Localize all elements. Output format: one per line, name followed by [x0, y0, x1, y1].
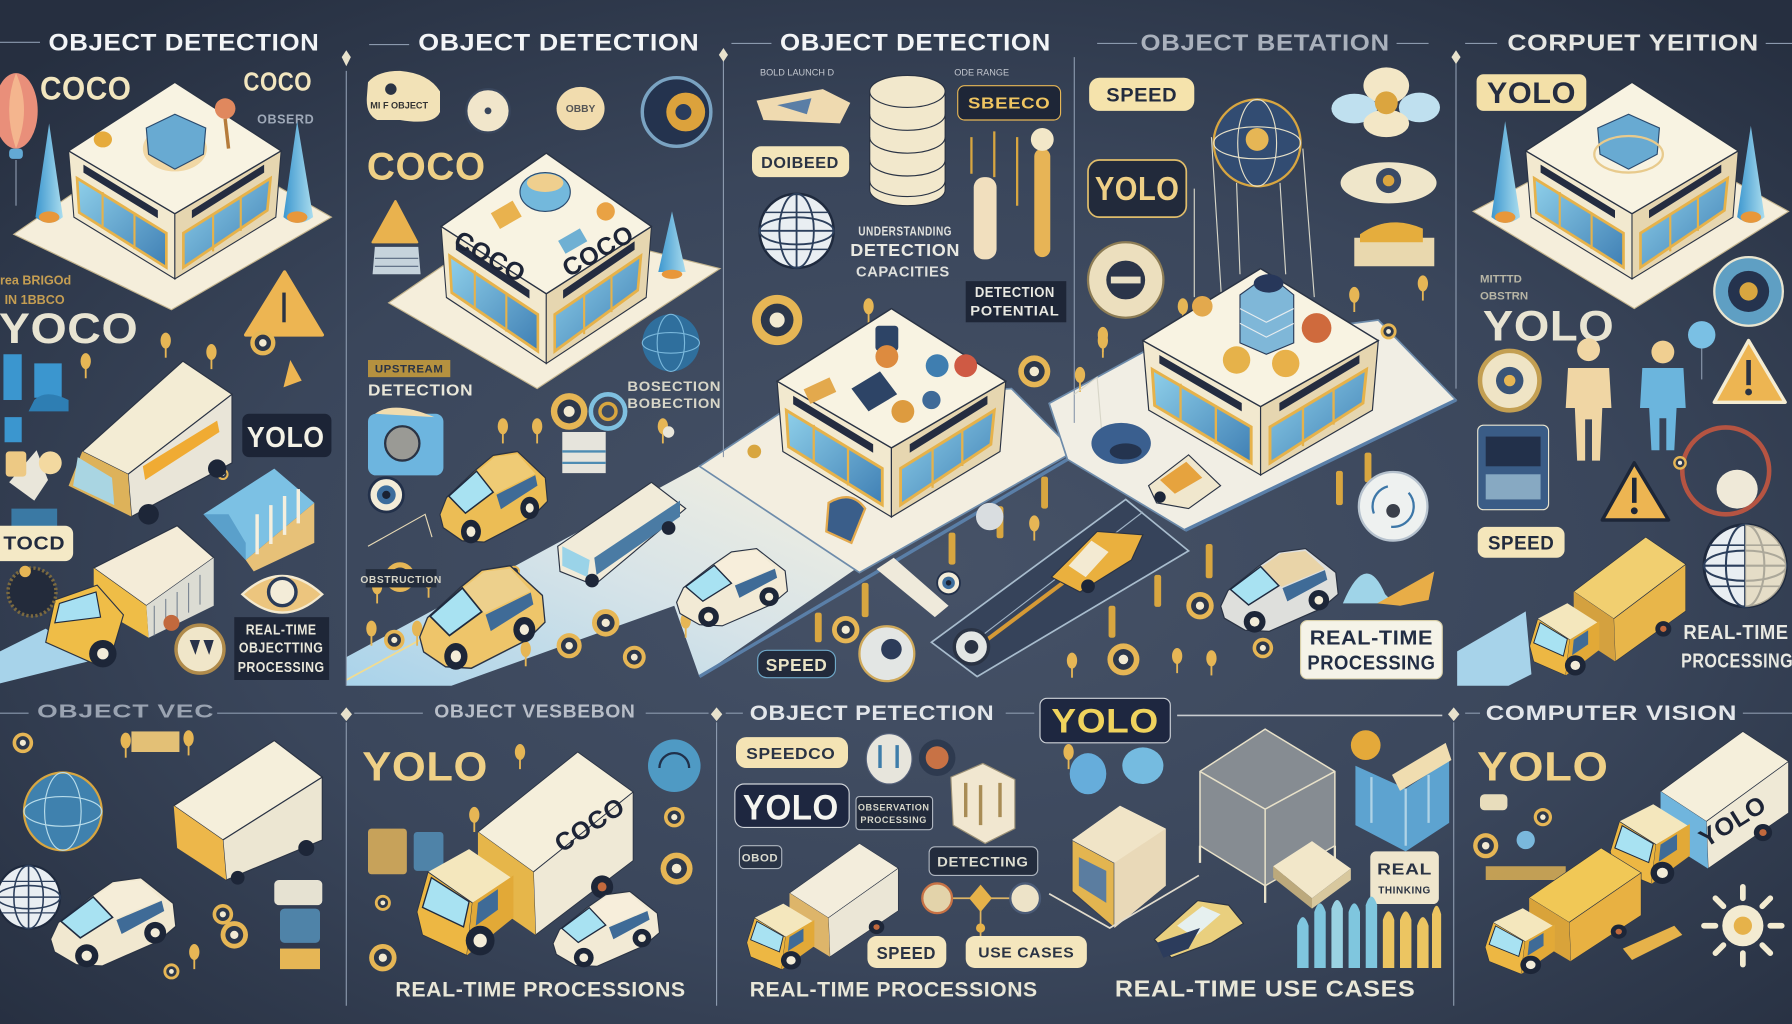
bottom text: REAL-TIME PROCESSIONS [395, 977, 686, 1002]
sphere [642, 314, 699, 371]
bar chart [1297, 897, 1441, 968]
cream label: DOIBEED [761, 155, 839, 172]
small COCO label: COCO [243, 66, 312, 96]
disk stack [870, 75, 945, 206]
speed label [1089, 78, 1194, 111]
speed label [736, 737, 848, 768]
detection label: DETECTION [975, 285, 1055, 301]
small icons [1473, 794, 1566, 880]
rooftop items [804, 326, 977, 423]
panel: bottom right [1473, 700, 1789, 974]
top-left items: BOLD LAUNCH D [760, 67, 834, 77]
icon: balloon [0, 73, 38, 206]
small caption: OBSERD [257, 112, 314, 126]
device card [1478, 425, 1549, 510]
road icons [832, 503, 1273, 681]
icon cluster [3, 330, 302, 534]
delivery truck [747, 843, 898, 970]
platform icons [747, 445, 865, 543]
title: OBJECT DETECTION [418, 29, 699, 56]
white car [677, 549, 787, 627]
title: OBJECT DETECTION [49, 29, 319, 56]
gold label: SBEECO [968, 96, 1050, 113]
blue box icon [203, 469, 314, 571]
small captions: rea BRIGOd [0, 274, 71, 288]
icon column [13, 730, 322, 979]
coco text: COCO [550, 792, 630, 858]
side caption: BOBECTION [627, 396, 721, 411]
store building [1526, 82, 1738, 279]
COCO signage [449, 220, 639, 289]
real-time label: REAL-TIME [246, 622, 317, 638]
blue ovals [1063, 744, 1163, 794]
blue gift box [1351, 730, 1451, 851]
round dial [1088, 242, 1163, 318]
DETECTION label: DETECTION [368, 382, 473, 399]
panel: bottom centre [735, 698, 1451, 1002]
panel: bottom second [362, 701, 701, 1002]
real-time label: REAL-TIME [1310, 627, 1433, 650]
bag icon [951, 763, 1015, 843]
title: OBJECT BETATION [1141, 29, 1390, 55]
rooftop items [491, 173, 615, 254]
YOLO word: YOLO [362, 744, 488, 790]
road strip [1457, 611, 1531, 686]
warning triangle [246, 272, 322, 335]
YOLO label: YOLO [1095, 171, 1179, 208]
small pill: OBOD [742, 853, 778, 865]
globe [24, 773, 102, 850]
blue person [1640, 341, 1686, 450]
small icons: OBSTRUCTION [360, 575, 442, 586]
detection label: POTENTIAL [970, 303, 1059, 318]
gold white car [1149, 455, 1221, 509]
road strip [0, 629, 91, 683]
silver car [1221, 549, 1338, 633]
cream tile [1273, 841, 1351, 909]
title: CORPUET YEITION [1507, 29, 1759, 55]
speed label [1478, 527, 1565, 558]
use cases pill: USE CASES [978, 946, 1074, 962]
small gold part [1623, 926, 1682, 960]
real label: REAL [1377, 861, 1432, 878]
dotted sphere [8, 566, 56, 616]
store building [441, 153, 651, 363]
panel: top-right store [1457, 29, 1792, 686]
small captions [0, 274, 71, 307]
use cases pill [966, 936, 1087, 968]
panel: top-left store [0, 29, 331, 683]
cream label [752, 146, 849, 177]
bottom text left: REAL-TIME PROCESSIONS [750, 977, 1038, 1002]
TOCD label [0, 526, 73, 561]
warning triangle [1714, 341, 1785, 402]
cream oval icon [1341, 162, 1437, 203]
blue icon card [368, 408, 443, 475]
store plate [1473, 126, 1789, 309]
real-time label [1301, 621, 1442, 679]
rocket [658, 211, 686, 279]
real-time label: PROCESSING [238, 660, 325, 676]
YOLO word: YOLO [1483, 303, 1614, 350]
COCO label: COCO [367, 145, 486, 188]
half globe [1704, 525, 1786, 607]
cream circle icon [176, 625, 224, 673]
gold label [368, 360, 450, 377]
YOLO gold label: YOLO [1051, 703, 1159, 741]
top-left items [757, 67, 1009, 123]
round icons [866, 734, 955, 784]
store plate [389, 217, 720, 389]
camera icon: MI F OBJECT [370, 101, 429, 111]
speed label [758, 650, 835, 678]
small captions: IN 1BBCO [5, 293, 65, 307]
title: OBJECT DETECTION [780, 29, 1051, 56]
divider diamonds [341, 48, 1461, 721]
COCO signage: COCO [558, 220, 639, 283]
location pin icon [1343, 571, 1434, 606]
TOCD label: TOCD [3, 533, 65, 554]
stacked gold box [1354, 222, 1434, 266]
spiral icons [551, 393, 625, 473]
yellow car [420, 566, 545, 670]
yellow van [440, 451, 547, 543]
real-time label [234, 617, 329, 680]
panel: right central store [758, 29, 1442, 681]
warning triangle [1602, 463, 1669, 520]
captions [1480, 273, 1528, 302]
blue ball [1688, 321, 1715, 379]
store building [777, 309, 1006, 517]
yellow truck [1485, 848, 1641, 974]
cream car [51, 878, 176, 967]
truck [174, 741, 322, 885]
round icons [466, 78, 711, 146]
detection label [966, 281, 1066, 322]
eye ring [1480, 351, 1539, 410]
small label [856, 797, 933, 830]
wire cube [1200, 729, 1335, 903]
YOLO white label: YOLO [743, 787, 839, 827]
speed label: SPEEDCO [746, 746, 835, 763]
YOLO gold label [1040, 698, 1170, 743]
capacities text: DETECTION [850, 240, 960, 260]
globe small [0, 866, 60, 929]
white car [553, 891, 659, 967]
striped truck [46, 526, 214, 667]
node diagram [922, 883, 1040, 939]
speed label: SPEED [1106, 85, 1177, 107]
YOLO truck text: YOLO [1694, 790, 1771, 853]
small pill [739, 846, 782, 869]
real-time text [1681, 621, 1792, 672]
yellow taxi [1154, 901, 1243, 958]
speed label: SPEED [1488, 533, 1554, 555]
gold label [958, 86, 1061, 120]
eye icon [242, 576, 322, 613]
YOLO label: YOLO [247, 422, 325, 454]
capacities text: UNDERSTANDING [858, 224, 952, 238]
detecting label: DETECTING [937, 854, 1029, 869]
panel: central store [747, 29, 1108, 543]
bottom text right: REAL-TIME USE CASES [1115, 976, 1415, 1002]
YOCO word: YOCO [0, 305, 138, 352]
isometric kiosk [1049, 806, 1199, 928]
YOLO label: YOLO [1487, 77, 1576, 110]
YOLO word: YOLO [1477, 744, 1609, 790]
small rings [1098, 275, 1428, 352]
large truck box [69, 361, 232, 525]
rooftop object [94, 98, 235, 171]
speed pill [867, 936, 946, 968]
test tubes [971, 128, 1054, 259]
sun icon [1704, 887, 1782, 965]
small rings [752, 295, 1108, 446]
panel: bottom left [0, 701, 322, 979]
top-left items: ODE RANGE [954, 67, 1009, 77]
gold label: UPSTREAM [375, 364, 443, 376]
side caption [627, 379, 721, 411]
YOLO label [242, 414, 331, 457]
target icon [1714, 257, 1783, 326]
central street scene [346, 320, 1456, 686]
capacities text [850, 224, 960, 281]
small icons [360, 418, 691, 669]
yellow car on road [1051, 531, 1143, 593]
real-time label: OBJECTTING [239, 641, 323, 657]
cream flower icon [1331, 67, 1440, 137]
loop icon [1673, 427, 1769, 514]
coco truck [417, 752, 633, 955]
trees [1491, 121, 1765, 223]
title: OBJECT PETECTION [750, 700, 994, 725]
rooftop tower [1192, 274, 1331, 377]
blue car [1091, 423, 1151, 464]
camera icon [367, 71, 440, 122]
cream person [1566, 338, 1611, 461]
COCO signage: COCO [449, 226, 530, 289]
connector line [1177, 714, 1442, 716]
round icon [648, 739, 701, 792]
globe [760, 194, 834, 268]
store building [69, 82, 281, 279]
side caption: BOSECTION [627, 379, 721, 394]
store building [1143, 269, 1378, 475]
warning and stack [373, 201, 421, 274]
small label: OBSERVATION [858, 802, 930, 812]
white bus [558, 482, 686, 587]
captions: OBSTRN [1480, 290, 1528, 302]
speed pill: SPEED [877, 943, 936, 963]
capacities text: CAPACITIES [856, 265, 950, 281]
round icons: OBBY [566, 104, 596, 115]
yellow truck [1530, 537, 1686, 675]
title: OBJECT VEC [37, 701, 214, 722]
detecting label [929, 847, 1038, 875]
COCO label: COCO [40, 70, 131, 106]
icon cluster [368, 744, 693, 971]
network globe [1194, 99, 1314, 320]
title: COMPUTER VISION [1486, 700, 1737, 725]
panel: second store [360, 29, 787, 670]
store plate [14, 126, 331, 310]
trees [35, 121, 313, 223]
rooftop object [1594, 114, 1663, 173]
yolo truck [1610, 731, 1789, 884]
real-time label: PROCESSING [1307, 652, 1435, 675]
title: OBJECT VESBEBON [434, 701, 635, 722]
real label: THINKING [1378, 886, 1431, 897]
dial icon [1359, 472, 1427, 541]
speed label: SPEED [766, 655, 827, 675]
small label: PROCESSING [860, 815, 927, 825]
YOLO label [1088, 160, 1186, 217]
real label [1370, 851, 1439, 904]
captions: MITTTD [1480, 273, 1522, 285]
